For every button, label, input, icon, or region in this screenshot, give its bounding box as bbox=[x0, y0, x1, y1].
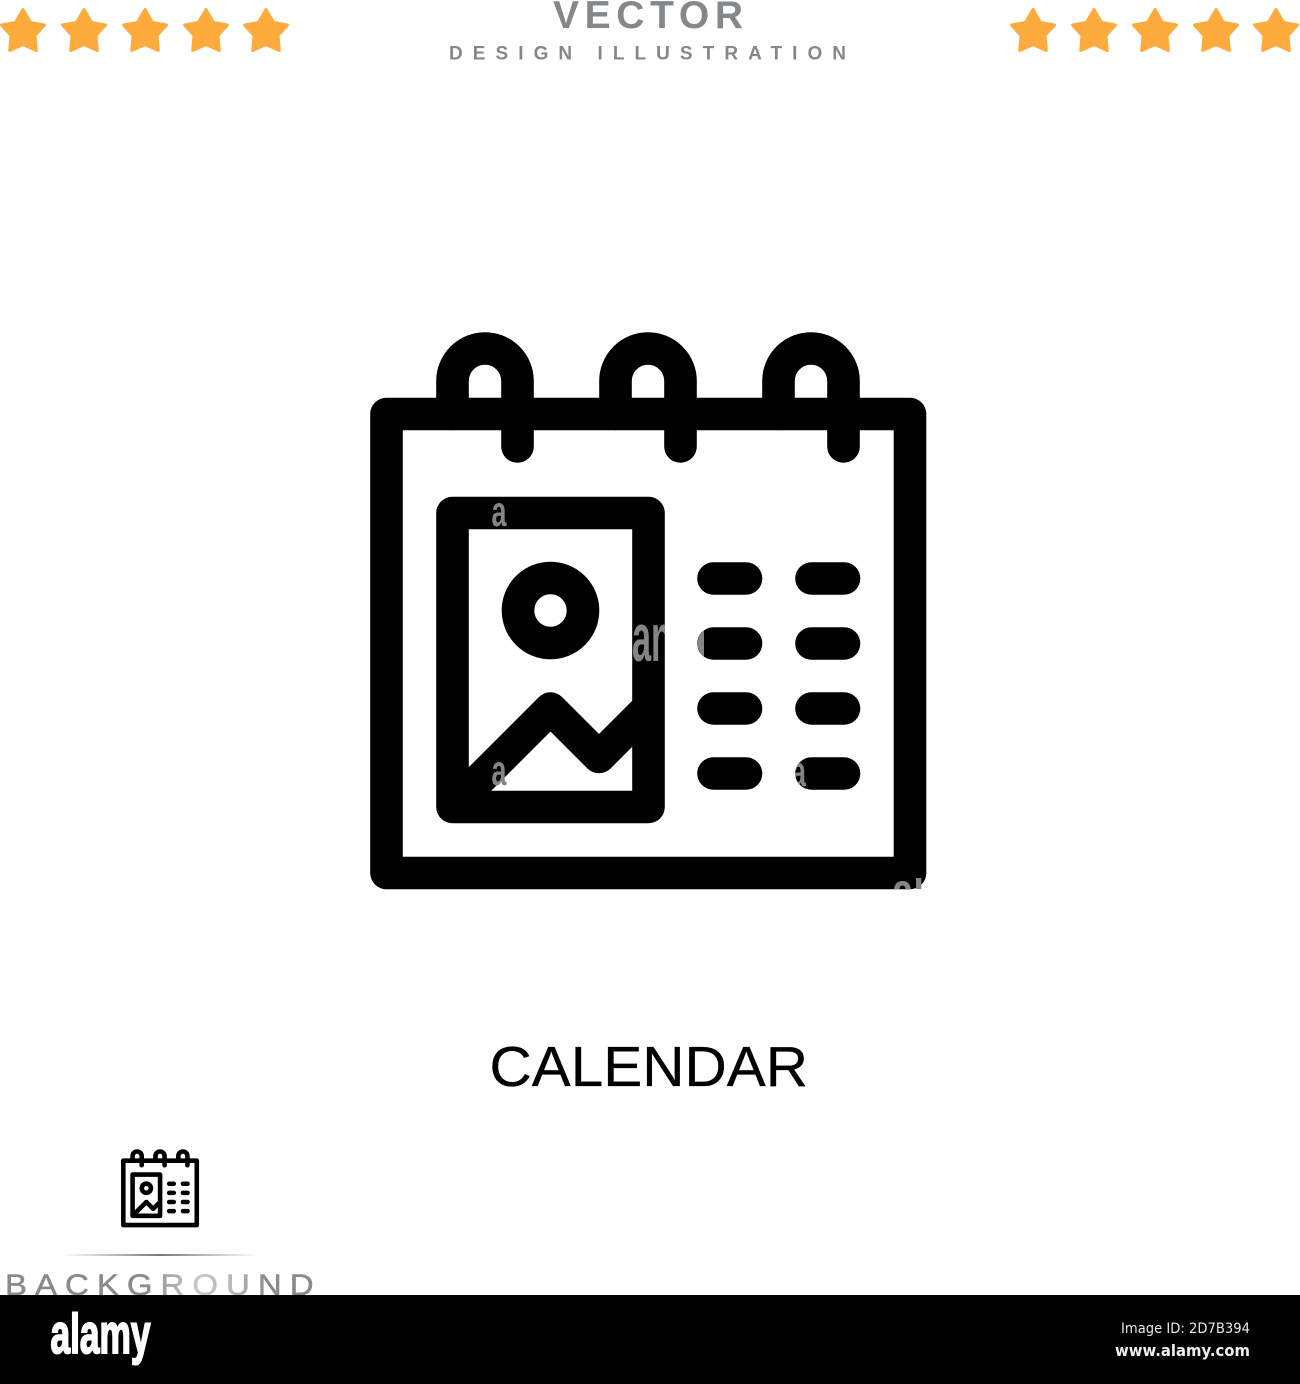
picture frame bbox=[452, 513, 648, 807]
icon: small calendar bbox=[123, 1151, 197, 1225]
watermark letters over icon: an bbox=[632, 600, 672, 676]
watermark letters over icon: al bbox=[892, 863, 924, 919]
footer logo: alamy: alamy bbox=[50, 1302, 150, 1365]
watermark letters over icon: a bbox=[791, 748, 807, 796]
divider under small icon bbox=[60, 1254, 260, 1256]
footer url: www.alamy.com bbox=[1115, 1341, 1250, 1360]
watermark letters over icon: a bbox=[492, 488, 507, 536]
right star rating bbox=[1012, 10, 1298, 50]
title: CALENDAR: CALENDAR bbox=[490, 1035, 808, 1099]
watermark letters over icon bbox=[492, 503, 922, 889]
footer bar bbox=[0, 1295, 1300, 1384]
label: BACKGROUND: BACKGROUND bbox=[5, 1267, 314, 1302]
picture mountains bbox=[452, 708, 648, 806]
subheading: DESIGN ILLUSTRATION: DESIGN ILLUSTRATION bbox=[449, 44, 846, 64]
spiral rings bbox=[452, 348, 844, 446]
icon: large calendar bbox=[386, 348, 910, 873]
footer image id: Image ID: 2D7B394 bbox=[1121, 1321, 1250, 1337]
calendar page frame bbox=[386, 414, 910, 873]
left star rating bbox=[2, 10, 288, 50]
watermark letters over icon: a bbox=[492, 747, 507, 795]
date rows bbox=[714, 578, 844, 774]
picture sun bbox=[518, 578, 583, 643]
